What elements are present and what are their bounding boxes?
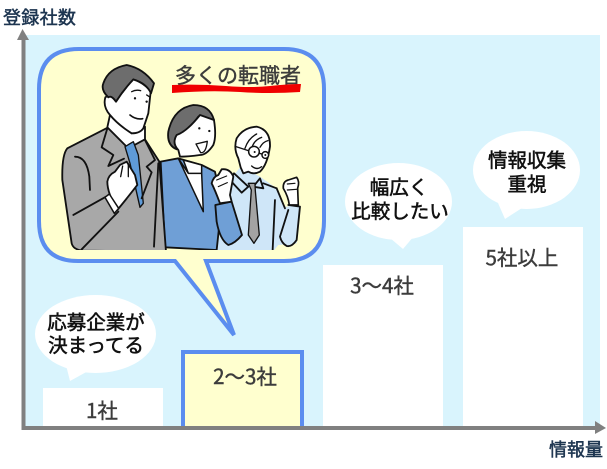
callout: want to compare widely: 比較したい [351,195,449,224]
axis label: amount of information: 情報量 [549,436,603,462]
panel: chart background [25,35,600,426]
bar: 5 or more companies: 5社以上 [486,241,558,271]
callout: focus on gathering information: 重視 [507,168,547,197]
callout: want to compare widely [345,163,452,249]
bar: 3 to 4 companies: 3～4社 [350,269,414,299]
illustration: three business people [62,65,301,252]
callout: focus on gathering information: 情報収集 [488,144,566,173]
callout: focus on gathering information [473,131,580,219]
bar: 3 to 4 companies [323,265,443,426]
callout: want to compare widely: 幅広く [370,171,428,200]
bar: 1 company [43,388,163,426]
callout: applicant company is decided [35,295,156,381]
bar: 5 or more companies [463,227,583,426]
figure: man in grey suit [62,65,166,252]
panel: speech bubble with job seekers illustration [39,49,324,335]
callout: applicant company is decided: 決まってる [48,329,144,358]
heading: many job changers: 多くの転職者 [175,60,301,90]
bar: 1 company: 1社 [86,394,118,424]
bar: 2 to 3 companies, highlighted: 2～3社 [213,360,277,390]
figure: young man with glasses [217,127,301,252]
axis: vertical registered companies [17,29,29,430]
bar: 2 to 3 companies, highlighted [183,352,302,428]
callout: applicant company is decided: 応募企業が [47,306,145,335]
figure: woman in blue vest [161,105,242,250]
axis: horizontal amount of information [22,421,606,434]
axis label: number of registered companies: 登録社数 [3,4,76,30]
